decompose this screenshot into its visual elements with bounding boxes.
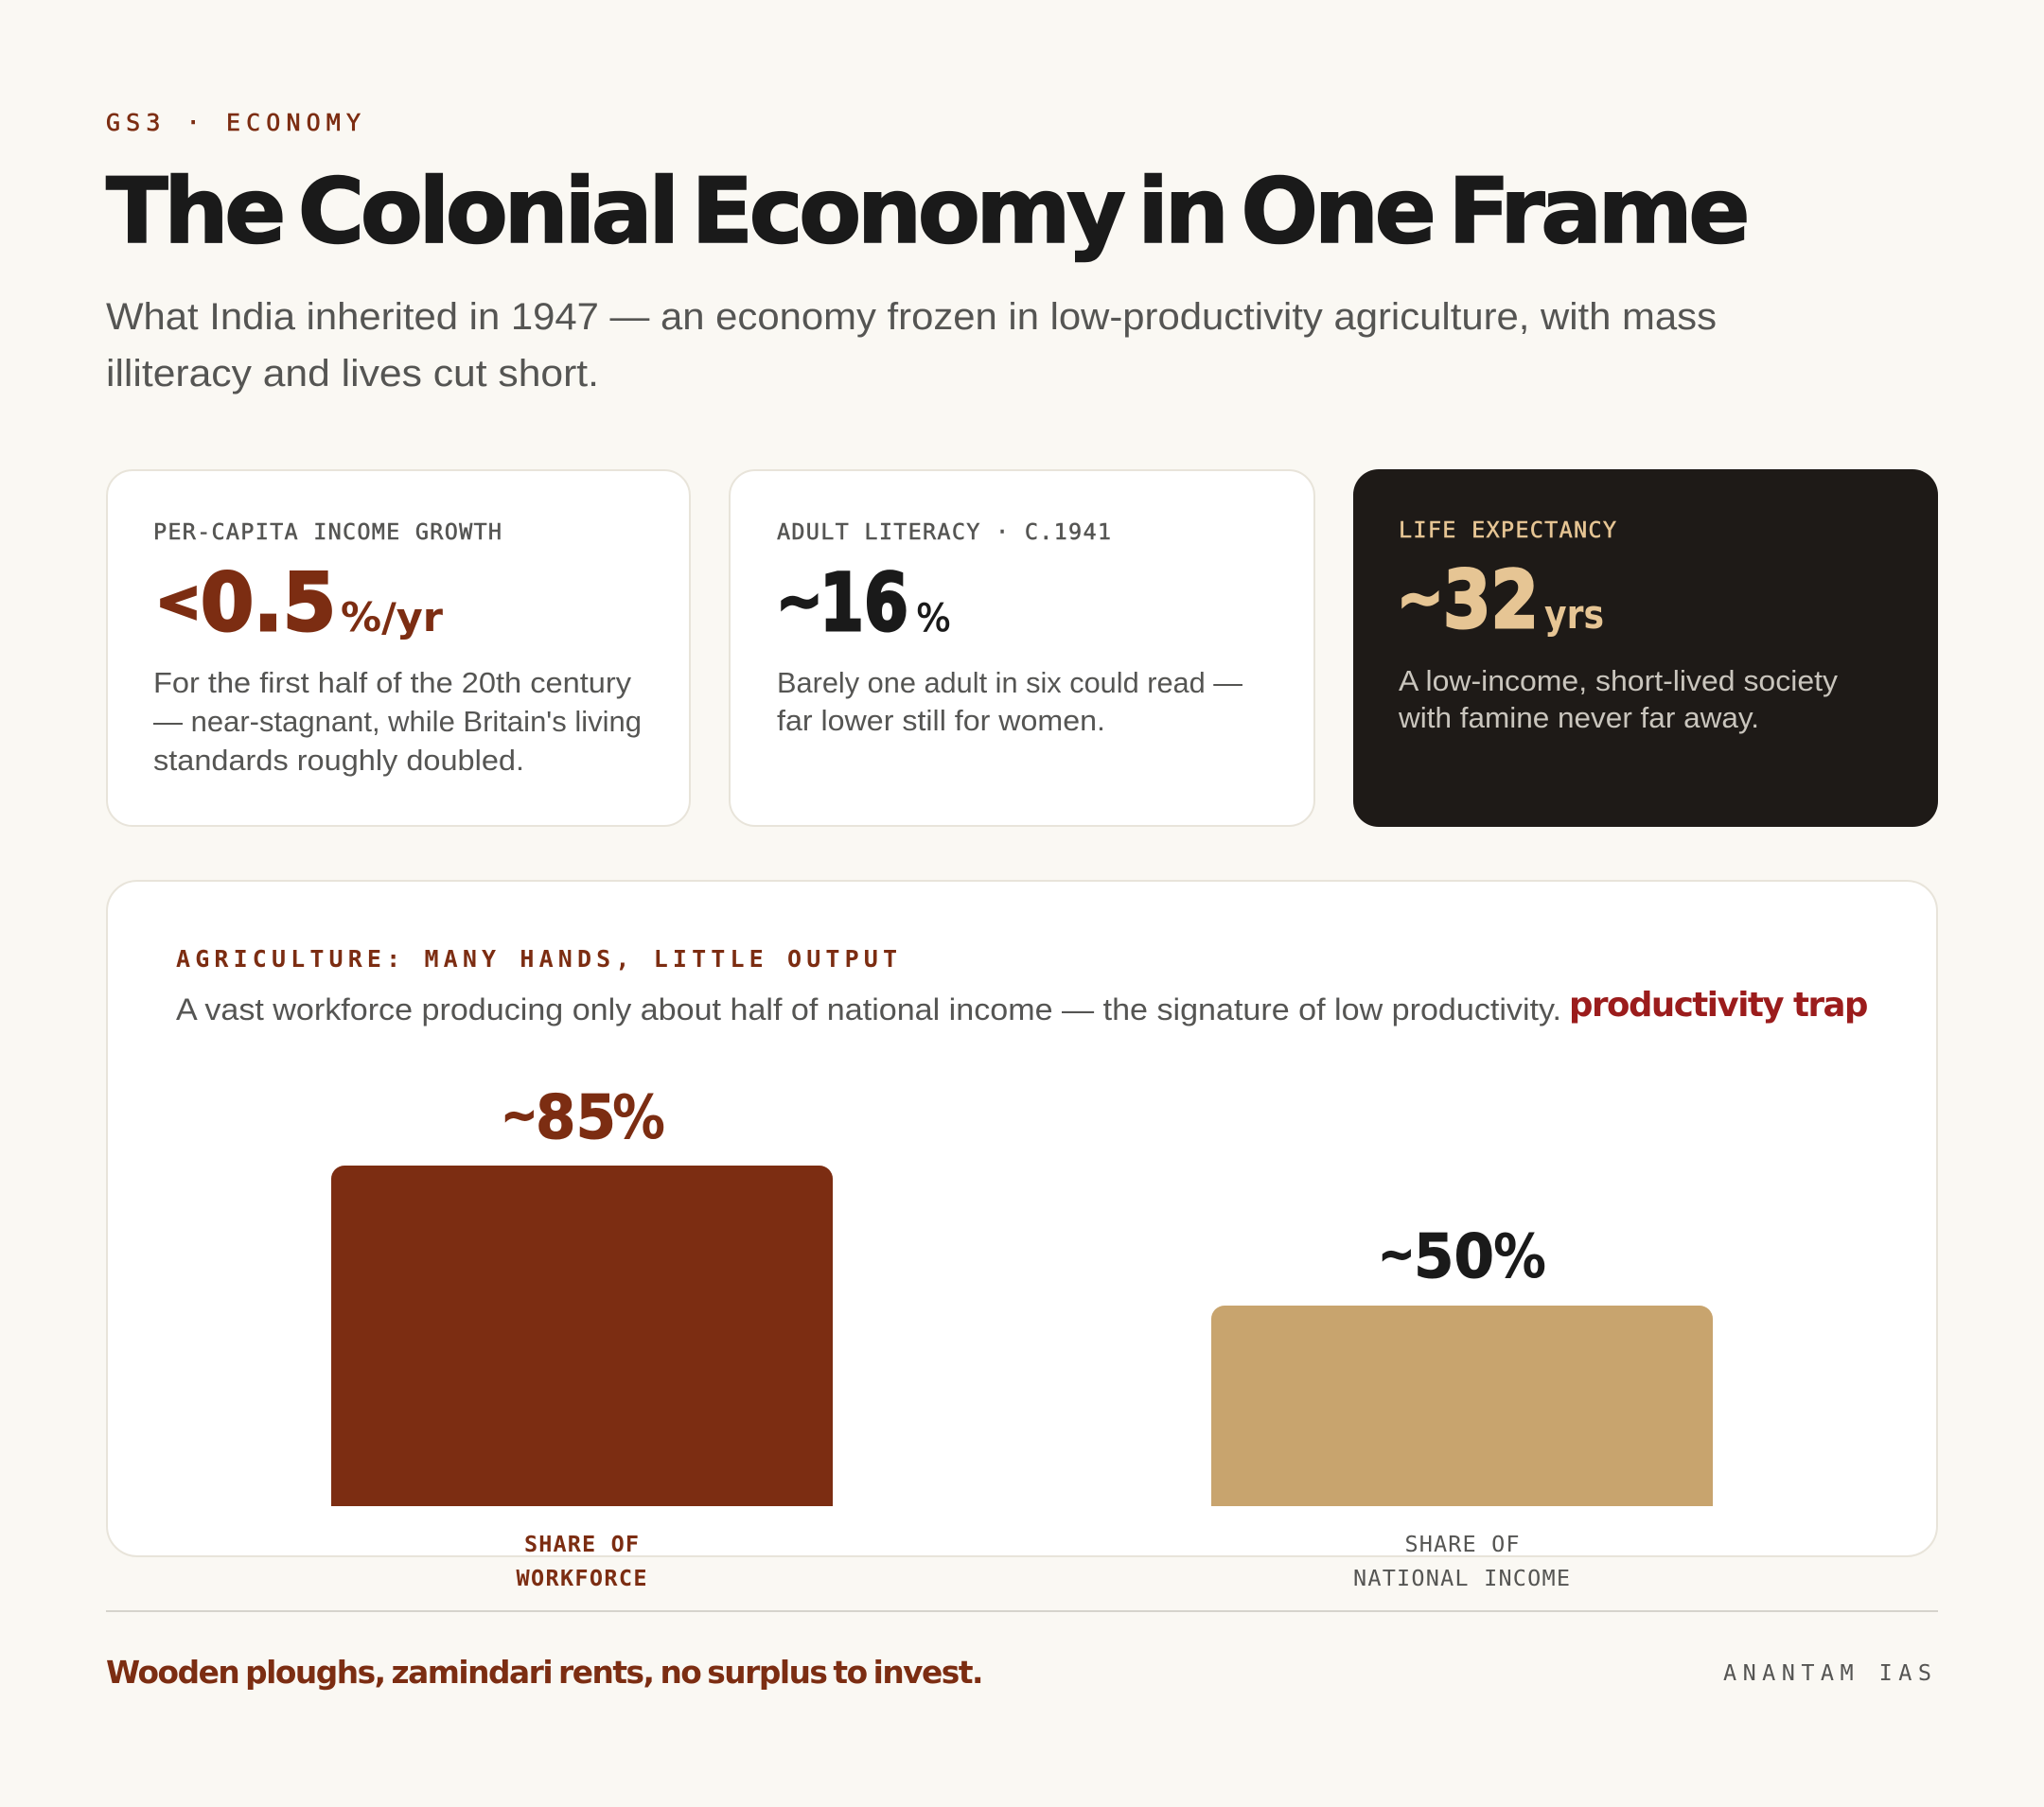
bar label: share of workforce: WORKFORCE bbox=[517, 1565, 647, 1591]
description: literacy: far lower still for women. bbox=[777, 704, 1105, 737]
footer brand: ANANTAM IAS bbox=[1723, 1659, 1931, 1686]
panel: life expectancy bbox=[1353, 469, 1938, 827]
panel heading: AGRICULTURE: MANY HANDS, LITTLE OUTPUT bbox=[176, 945, 897, 973]
value: about 85 percent: ~ bbox=[502, 1090, 537, 1140]
bar label: share of national income bbox=[1353, 1531, 1570, 1591]
value: about 85 percent: 85 bbox=[536, 1083, 616, 1153]
bar: share of national income bbox=[1211, 1222, 1713, 1506]
stat: about 16 percent bbox=[777, 556, 951, 649]
callout: productivity trap: productivity trap bbox=[1569, 986, 1868, 1025]
panel: agriculture bar chart bbox=[107, 881, 1937, 1556]
description: income growth: — near-stagnant, while Britain's living bbox=[153, 705, 642, 738]
eyebrow: subject tag: GS3 · ECONOMY bbox=[106, 109, 361, 136]
label: per-capita income growth: PER-CAPITA INCOME GROWTH bbox=[153, 518, 502, 545]
stat: about 32 years bbox=[1398, 553, 1604, 646]
stat: under 0.5 percent per year: 0.5 bbox=[201, 556, 336, 649]
description: literacy: Barely one adult in six could read — bbox=[777, 666, 1242, 699]
description: life expectancy: with famine never far away. bbox=[1398, 701, 1759, 734]
bar: share of workforce bbox=[331, 1083, 833, 1506]
bar label: share of workforce: SHARE OF bbox=[524, 1531, 639, 1557]
value: about 85 percent bbox=[502, 1083, 665, 1153]
subtitle: What India inherited in 1947 — an economy frozen in low-productivity agriculture, with mass bbox=[106, 296, 1717, 338]
description: income growth: For the first half of the 20th century bbox=[153, 666, 632, 699]
panel: adult literacy bbox=[730, 470, 1314, 826]
value: about 50 percent bbox=[1379, 1222, 1546, 1292]
description: income growth: standards roughly doubled. bbox=[153, 744, 524, 777]
stat: about 32 years: ~ bbox=[1398, 568, 1443, 630]
title: The Colonial Economy in One Frame bbox=[106, 160, 1746, 264]
panel: per-capita income growth bbox=[107, 470, 690, 826]
stat: about 16 percent: % bbox=[916, 597, 951, 640]
bar label: share of workforce bbox=[517, 1531, 647, 1591]
bar label: share of national income: NATIONAL INCOME bbox=[1353, 1565, 1570, 1591]
description: income growth bbox=[153, 666, 642, 777]
value: about 50 percent: ~ bbox=[1379, 1229, 1415, 1279]
value: about 50 percent: % bbox=[1493, 1222, 1546, 1292]
description: life expectancy: A low-income, short-lived society bbox=[1399, 664, 1839, 697]
label: life expectancy: LIFE EXPECTANCY bbox=[1399, 517, 1616, 543]
description: life expectancy bbox=[1398, 664, 1839, 734]
stat: about 16 percent: ~ bbox=[777, 570, 822, 633]
subtitle: illiteracy and lives cut short. bbox=[106, 353, 599, 395]
stat: about 16 percent: 16 bbox=[819, 556, 908, 649]
description: literacy bbox=[777, 666, 1242, 737]
stat: under 0.5 percent per year: %/yr bbox=[341, 594, 443, 640]
footer takeaway: Wooden ploughs, zamindari rents, no surplus to invest. bbox=[106, 1654, 982, 1691]
bar label: share of national income: SHARE OF bbox=[1404, 1531, 1520, 1557]
value: about 85 percent: % bbox=[612, 1083, 665, 1153]
label: adult literacy: ADULT LITERACY · C.1941 bbox=[777, 518, 1111, 545]
subtitle bbox=[106, 296, 1717, 395]
stat: under 0.5 percent per year: < bbox=[156, 571, 201, 633]
stat: about 32 years: yrs bbox=[1544, 591, 1604, 638]
panel description: A vast workforce producing only about half of national income — the signature of low productivity. bbox=[176, 992, 1561, 1026]
stat: about 32 years: 32 bbox=[1443, 553, 1539, 646]
value: about 50 percent: 50 bbox=[1414, 1222, 1494, 1292]
stat: under 0.5 percent per year bbox=[156, 556, 443, 649]
